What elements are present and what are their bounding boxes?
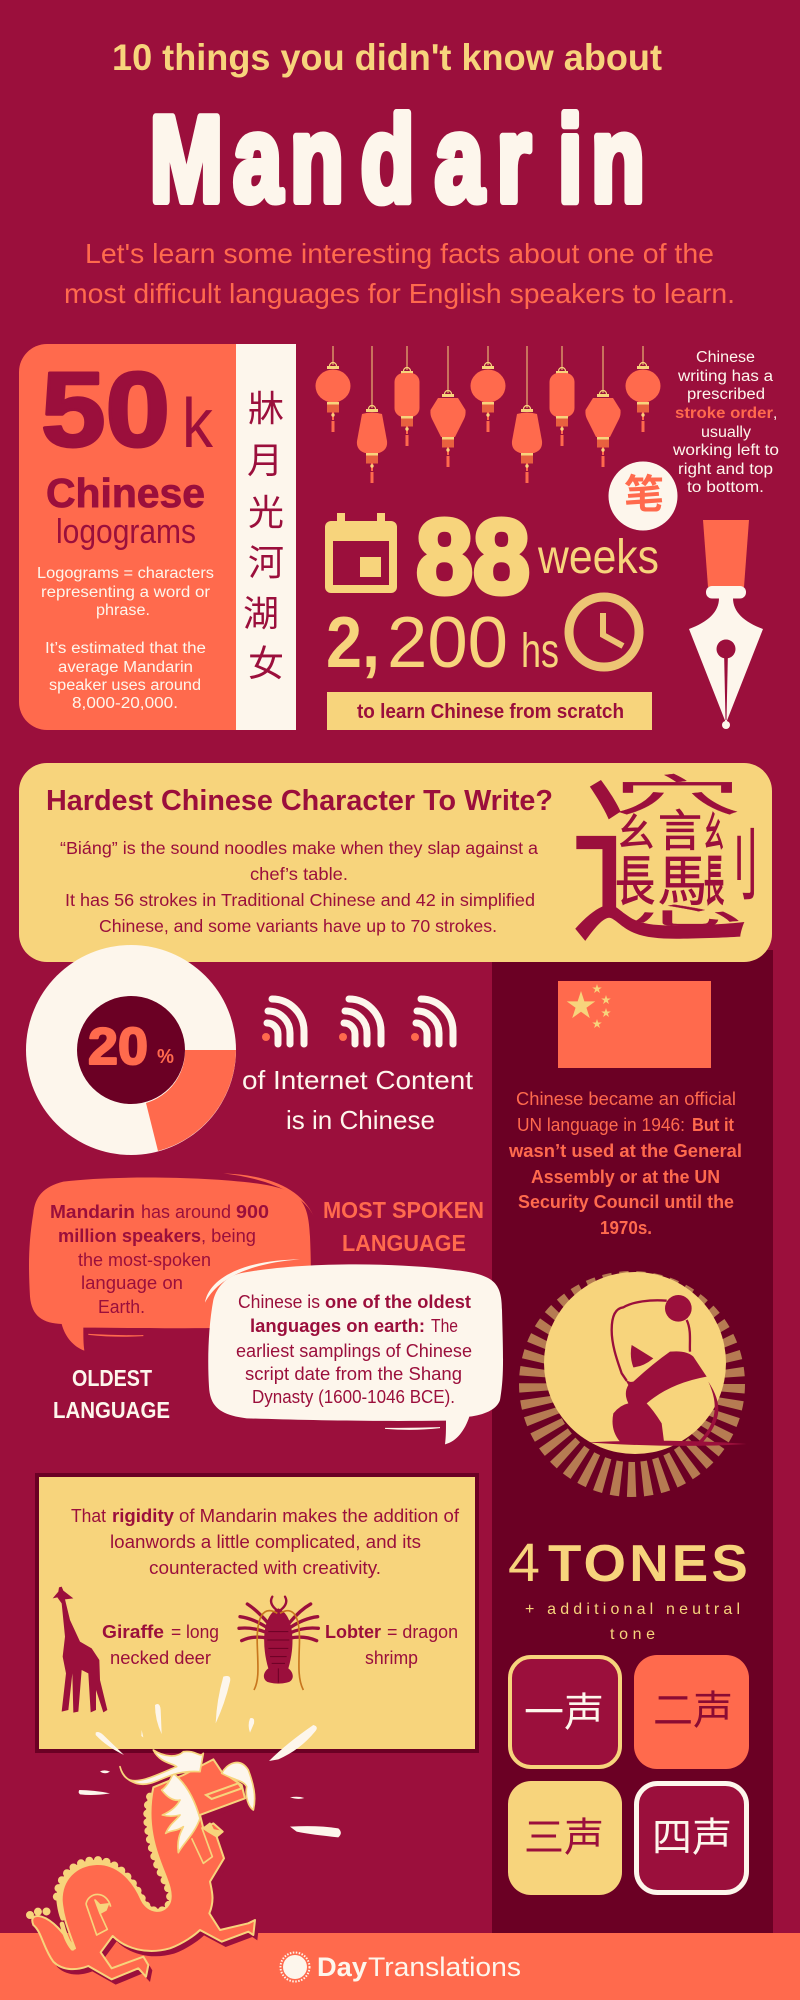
- text: UN language: UN language in 1946:: [517, 1115, 685, 1135]
- stat: 2,200 hs: hs: [521, 625, 559, 678]
- description: [60, 838, 538, 936]
- donut label: %: [157, 1046, 174, 1068]
- panel: vertical characters strip: 牀: [248, 380, 284, 432]
- icon: biang character: 言: [658, 795, 702, 859]
- loanwords intro: of Mandarin makes the addition of: [179, 1506, 460, 1526]
- panel: vertical characters strip: 女: [248, 635, 284, 687]
- panel: 50k logograms: [19, 344, 236, 730]
- sun disc: [544, 1272, 726, 1454]
- dragon mane: [120, 1750, 255, 1853]
- illustration: dragon: [30, 1676, 341, 1985]
- stat: 88 weeks: weeks: [537, 531, 659, 584]
- stat: 2,200 hs: 2,: [326, 603, 380, 683]
- icon: clock: [569, 597, 639, 667]
- card: first tone: 一声: [524, 1680, 604, 1738]
- dragon mouth: [206, 1783, 242, 1799]
- stroke order text: to bottom.: [687, 479, 764, 496]
- lobster text: = dragon: [387, 1622, 458, 1642]
- logogram description: 8,000-20,000.: [72, 695, 178, 712]
- sun rays: [536, 1288, 728, 1480]
- title line: 10 things you didn't know about: [112, 37, 662, 78]
- panel: loanwords: [37, 1475, 477, 1751]
- panel: vertical characters strip: [236, 344, 296, 730]
- icon: brush character badge: 笔: [624, 462, 664, 520]
- heading: oldest language: LANGUAGE: [53, 1397, 170, 1423]
- loanwords intro: That: [71, 1506, 106, 1526]
- stroke order text: [672, 349, 779, 496]
- burst lines: [79, 1676, 341, 1837]
- giraffe text: Giraffe: [102, 1622, 164, 1642]
- card: third tone: 三声: [524, 1805, 604, 1863]
- panda silhouette: [587, 1295, 747, 1446]
- logogram description: phrase.: [96, 602, 150, 619]
- bubble text: [236, 1292, 472, 1407]
- heading: most spoken language: [323, 1197, 484, 1256]
- panel background: [19, 344, 236, 730]
- logo wordmark: Translations: [368, 1952, 521, 1982]
- footer band: [0, 1933, 800, 2000]
- bubble text: Mandarin: [50, 1202, 135, 1222]
- bubble text: language on: [81, 1273, 183, 1293]
- description: It has 56 strokes in Traditional Chinese and 42 in simplified: [65, 890, 535, 910]
- giraffe text: necked deer: [110, 1648, 211, 1668]
- subtitle: most difficult languages for English speakers to learn.: [64, 278, 735, 309]
- dragon scales: [30, 1797, 172, 1918]
- stat: 2,200 hs: 200: [387, 603, 508, 683]
- bubble text: script date from the Shang: [245, 1364, 462, 1384]
- subtitle: [64, 238, 735, 309]
- lobster text: shrimp: [365, 1648, 418, 1668]
- text: UN language: wasn’t used at the General: [508, 1141, 742, 1161]
- icon: giraffe: [53, 1587, 107, 1713]
- stroke order text: prescribed: [687, 386, 765, 403]
- loanwords intro: counteracted with creativity.: [149, 1558, 381, 1578]
- right dark column: [492, 950, 773, 1933]
- stroke order text: ,: [773, 405, 777, 422]
- icon: lobster: [239, 1597, 318, 1690]
- subheading: + additional neutral: [525, 1601, 740, 1618]
- heading: Chinese logograms: logograms: [56, 513, 196, 551]
- loanwords intro: loanwords a little complicated, and its: [110, 1532, 421, 1552]
- description: “Biáng” is the sound noodles make when they slap against a: [60, 838, 538, 858]
- logogram description: Logograms = characters: [37, 565, 214, 582]
- icon: biang character: 刂: [716, 804, 759, 917]
- heading: Hardest Chinese Character To Write?: [46, 785, 553, 817]
- text: internet content: of Internet Content: [242, 1065, 474, 1095]
- callout: to learn from scratch: [327, 692, 652, 730]
- stat: 2,200 hs: [326, 603, 559, 683]
- callout: to learn from scratch: to learn Chinese from scratch: [357, 701, 624, 723]
- stroke order text: Chinese: [696, 349, 755, 366]
- description: Chinese, and some variants have up to 70 strokes.: [99, 916, 497, 936]
- speech bubble: most spoken: [29, 1173, 314, 1351]
- logo mark: [280, 1952, 310, 1982]
- bubble text: the most-spoken: [78, 1250, 211, 1270]
- donut label: 20: [88, 1018, 148, 1076]
- text: internet content: [242, 1065, 474, 1135]
- bubble text: Chinese is: [238, 1292, 320, 1312]
- lobster text: Lobter: [325, 1622, 381, 1642]
- logogram description: speaker uses around: [49, 677, 201, 694]
- lanterns: [316, 346, 660, 483]
- panel: hardest character: [19, 716, 772, 984]
- icon: biang character: 辶: [566, 716, 751, 984]
- icon: biang character: 馬: [658, 837, 707, 916]
- loanwords intro: rigidity: [112, 1506, 174, 1526]
- card: second tone: 二声: [653, 1678, 733, 1736]
- tail stripe: [62, 1924, 73, 1948]
- logogram description: [37, 565, 214, 712]
- stat: 50k: [41, 351, 214, 469]
- tone cards: [508, 1655, 749, 1895]
- icon: biang character: 穴: [612, 760, 742, 824]
- stroke order text: working left to: [672, 442, 779, 459]
- header: [64, 37, 735, 309]
- card: third tone: [508, 1781, 622, 1895]
- icon: biang character: 心: [630, 896, 742, 931]
- card: first tone: [510, 1657, 620, 1767]
- dragon body: [32, 1759, 255, 1979]
- subheading: tone: [610, 1626, 655, 1643]
- subtitle: Let's learn some interesting facts about one of the: [85, 238, 714, 269]
- icon: biang character: 幺: [704, 800, 724, 859]
- icon: biang character: 長: [704, 838, 724, 916]
- giraffe text: [102, 1622, 219, 1668]
- logo wordmark: Day: [317, 1952, 367, 1982]
- description: chef’s table.: [250, 864, 348, 884]
- stroke order text: usually: [701, 424, 751, 441]
- heading: 4 tones: 4: [508, 1533, 540, 1593]
- subheading: [525, 1601, 740, 1643]
- text: UN language: 1970s.: [600, 1218, 652, 1238]
- stroke order text: stroke order: [675, 405, 773, 422]
- giraffe text: = long: [171, 1622, 219, 1642]
- loanwords intro: [71, 1506, 460, 1578]
- bubble text: million speakers: [58, 1226, 201, 1246]
- heading: Chinese logograms: Chinese: [46, 470, 205, 516]
- bubble text: Earth.: [98, 1297, 145, 1317]
- bubble text: The: [431, 1316, 458, 1336]
- panel: vertical characters strip: 河: [248, 534, 284, 586]
- panel: vertical characters strip: 月: [247, 432, 283, 484]
- text: UN language: Chinese became an official: [516, 1089, 736, 1109]
- stat: 50k: 50: [41, 351, 170, 469]
- bubble text: 900: [236, 1202, 269, 1222]
- icon: wifi signals: [262, 999, 453, 1044]
- dragon shadow: [36, 1765, 259, 1985]
- bubble text: earliest samplings of Chinese: [236, 1341, 472, 1361]
- card: fourth tone: 四声: [652, 1805, 732, 1863]
- bubble text: has around: [141, 1202, 231, 1222]
- heading: oldest language: OLDEST: [72, 1365, 152, 1391]
- icon: brush character badge: [608, 462, 678, 530]
- illustration: panda: [536, 1272, 747, 1480]
- bubble text: languages on earth:: [250, 1316, 425, 1336]
- panel: vertical characters strip: 湖: [243, 585, 279, 637]
- logogram description: average Mandarin: [58, 659, 193, 676]
- heading: oldest language: [53, 1365, 170, 1423]
- title: Mandarin: Mandarin: [150, 91, 645, 227]
- lobster text: [325, 1622, 458, 1668]
- text: UN language: But it: [692, 1115, 734, 1135]
- stat: 88 weeks: 88: [416, 498, 530, 616]
- text: UN language: [508, 1089, 742, 1238]
- text: internet content: is in Chinese: [286, 1105, 435, 1135]
- text: UN language: Assembly or at the UN: [531, 1167, 720, 1187]
- heading: most spoken language: LANGUAGE: [342, 1230, 466, 1256]
- icon: biang character: 幺: [617, 802, 655, 857]
- bubble text: [50, 1202, 269, 1317]
- card: fourth tone: [636, 1784, 746, 1892]
- stat: 50k: k: [182, 384, 214, 462]
- panel: vertical characters strip: 光: [248, 484, 284, 536]
- donut label: [88, 1018, 174, 1076]
- bubble text: Dynasty (1600-1046 BCE).: [252, 1387, 455, 1407]
- icon: biang character: 長: [615, 837, 655, 916]
- heading: 4 tones: [508, 1533, 751, 1643]
- heading: most spoken language: MOST SPOKEN: [323, 1197, 484, 1223]
- heading: 4 tones: TONES: [548, 1535, 751, 1593]
- heading: Chinese logograms: [46, 470, 205, 551]
- logo: Day Translations: [280, 1952, 521, 1982]
- card: second tone: [634, 1655, 749, 1769]
- icon: calendar: [325, 513, 397, 593]
- bubble text: , being: [201, 1226, 256, 1246]
- chart: donut 20%: [26, 945, 236, 1155]
- flag of China: [558, 981, 711, 1068]
- stat: 88 weeks: [416, 498, 659, 616]
- icon: fountain pen nib: [689, 520, 763, 729]
- speech bubble: oldest: [205, 1259, 503, 1444]
- stroke order text: writing has a: [677, 368, 773, 385]
- text: UN language: Security Council until the: [518, 1192, 734, 1212]
- stroke order text: right and top: [678, 461, 773, 478]
- logogram description: representing a word or: [41, 584, 210, 601]
- bubble text: one of the oldest: [325, 1292, 471, 1312]
- dragon limbs: [86, 1823, 223, 1935]
- logogram description: It’s estimated that the: [45, 640, 206, 657]
